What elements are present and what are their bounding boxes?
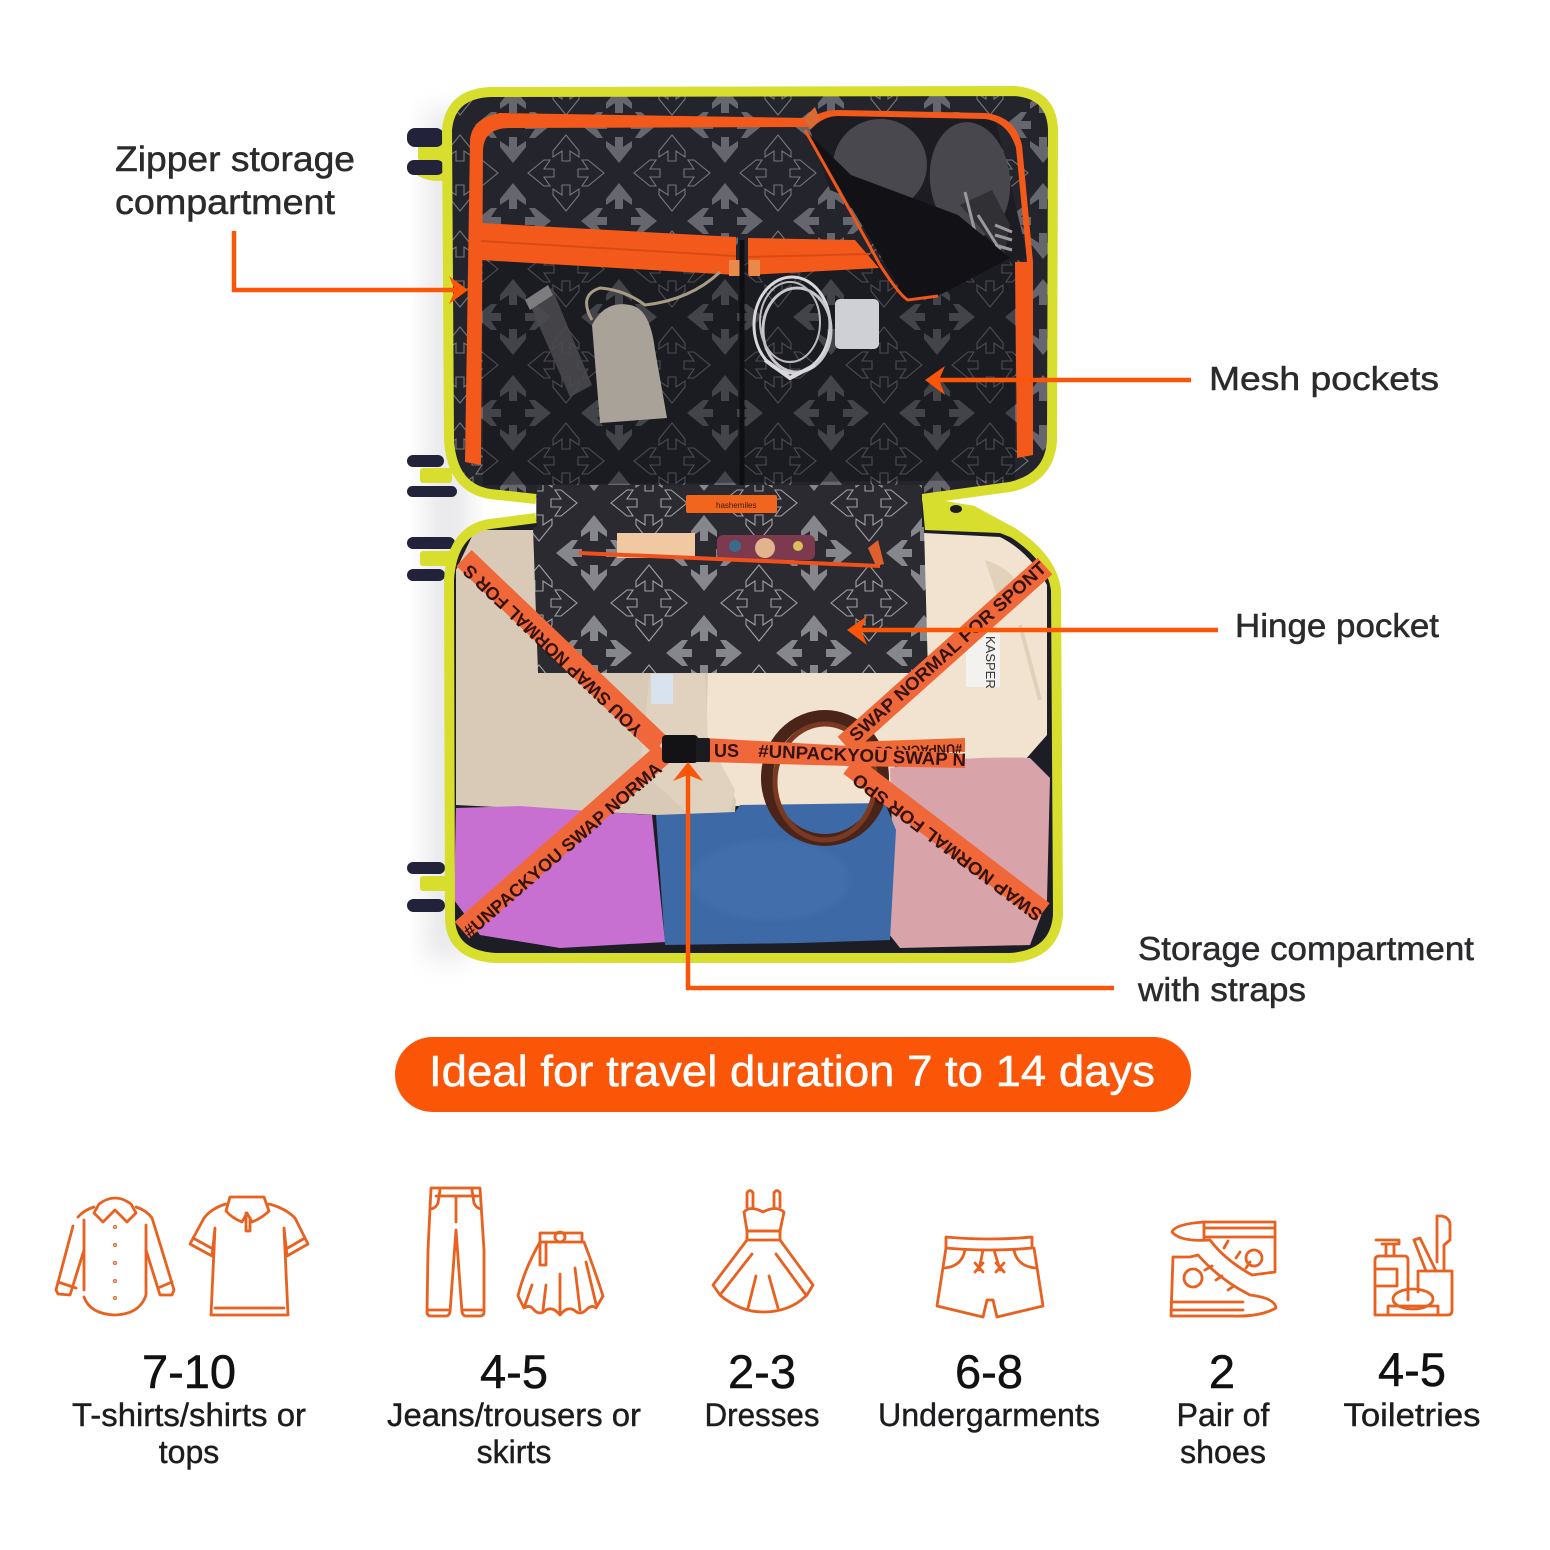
printed wallet in pocket: [717, 535, 815, 560]
icon: jeans: [427, 1188, 484, 1316]
callout: storage compartment with straps: with straps: [1137, 971, 1306, 1008]
icon: sneakers: [1171, 1222, 1276, 1316]
strap bottom left: #UNPACKYOU SWAP NORMA: [459, 759, 666, 942]
pocket zipper: [579, 553, 880, 566]
item count: dresses: 2-3: [728, 1345, 796, 1398]
strap buckle: [662, 735, 710, 763]
horizontal strap: [705, 738, 966, 770]
water bottle: [525, 285, 592, 397]
item count: shoes: shoes: [1180, 1434, 1266, 1470]
charging cable and adapter: [754, 277, 879, 378]
item count: jeans: [387, 1345, 641, 1470]
strap top right: SWAP NORMAL FOR SPONT: [845, 558, 1050, 745]
horizontal strap: US: [714, 741, 739, 761]
item count: shirts: [72, 1345, 306, 1470]
item count: undergarments: 6-8: [955, 1345, 1023, 1398]
item count: shirts: tops: [159, 1434, 219, 1470]
icon: undergarment shorts: [937, 1237, 1043, 1317]
orange zipper: frame: [465, 107, 1033, 465]
brown belt: [767, 716, 883, 840]
mesh pouch with drawstring: [587, 272, 720, 423]
suitcase bottom shell: [449, 497, 1058, 958]
suitcase top lid: [447, 91, 1053, 520]
blue jeans: [656, 803, 896, 945]
brand label: hashemiles: [716, 501, 756, 510]
banner: ideal travel duration: Ideal for travel duration 7 to 14 days: [429, 1047, 1155, 1096]
icon: shoes in zipper compartment: [806, 110, 1028, 262]
callout: hinge pocket: Hinge pocket: [1235, 607, 1439, 644]
icon: dress: [713, 1190, 813, 1312]
item count: jeans: skirts: [477, 1434, 551, 1470]
item count: dresses: Dresses: [704, 1397, 820, 1433]
clothing tags: KASPER: [983, 636, 998, 689]
horizontal strap: #UNPACKYOU: [874, 741, 962, 759]
callout: zipper storage compartment: [115, 140, 468, 304]
peach card in pocket: [617, 533, 695, 558]
pink folded top: [882, 757, 1050, 948]
purple folded top: [454, 806, 665, 948]
item count: toiletries: 4-5: [1378, 1343, 1446, 1396]
item count: shirts: T-shirts/shirts or: [72, 1397, 306, 1433]
callout: zipper storage compartment: Zipper storage: [115, 140, 355, 179]
icon: skirt: [518, 1232, 603, 1315]
icon: long-sleeve shirt: [56, 1198, 174, 1315]
icon: polo t-shirt: [190, 1197, 308, 1315]
folded beige sweater: [456, 530, 736, 816]
callout: mesh pockets: [925, 360, 1439, 397]
banner: ideal travel duration: [395, 1037, 1191, 1112]
soft shadow behind suitcase: [425, 110, 470, 960]
strap top left: YOU SWAP NORMAL FOR S: [459, 561, 647, 740]
hinge pocket flap: [533, 485, 928, 673]
brand label: [686, 495, 777, 513]
item count: dresses: [704, 1345, 820, 1433]
callout: zipper storage compartment: compartment: [115, 183, 335, 222]
zipper storage pouch: [805, 130, 1010, 302]
clothing tags: [651, 633, 1000, 704]
callout: storage compartment with straps: [673, 762, 1474, 1008]
horizontal strap: #UNPACKYOU SWAP N: [758, 741, 966, 770]
item count: shoes: 2: [1209, 1345, 1235, 1398]
strap bottom right: SWAP NORMAL FOR SPO: [849, 769, 1046, 925]
item count: shoes: [1176, 1345, 1270, 1470]
folded cream hoodie: [700, 533, 1047, 806]
item count: undergarments: [878, 1345, 1100, 1433]
item count: shirts: 7-10: [142, 1345, 236, 1398]
item count: toiletries: Toiletries: [1344, 1397, 1480, 1433]
item count: shoes: Pair of: [1176, 1397, 1270, 1433]
item count: undergarments: Undergarments: [878, 1397, 1100, 1433]
item count: toiletries: [1344, 1343, 1480, 1433]
orange zipper: pocket band: [481, 223, 736, 275]
icon: toiletries: [1375, 1216, 1452, 1315]
lime frame of top lid: [447, 91, 1053, 499]
lower mesh area: [483, 262, 1015, 485]
callout: mesh pockets: Mesh pockets: [1209, 360, 1439, 397]
callout: storage compartment with straps: Storage compartment: [1138, 930, 1474, 967]
item count: jeans: Jeans/trousers or: [387, 1397, 641, 1433]
suitcase wheels: [407, 128, 457, 912]
lime frame of bottom shell: [449, 497, 1058, 958]
item count: jeans: 4-5: [480, 1345, 548, 1398]
callout: hinge pocket: [847, 607, 1439, 645]
